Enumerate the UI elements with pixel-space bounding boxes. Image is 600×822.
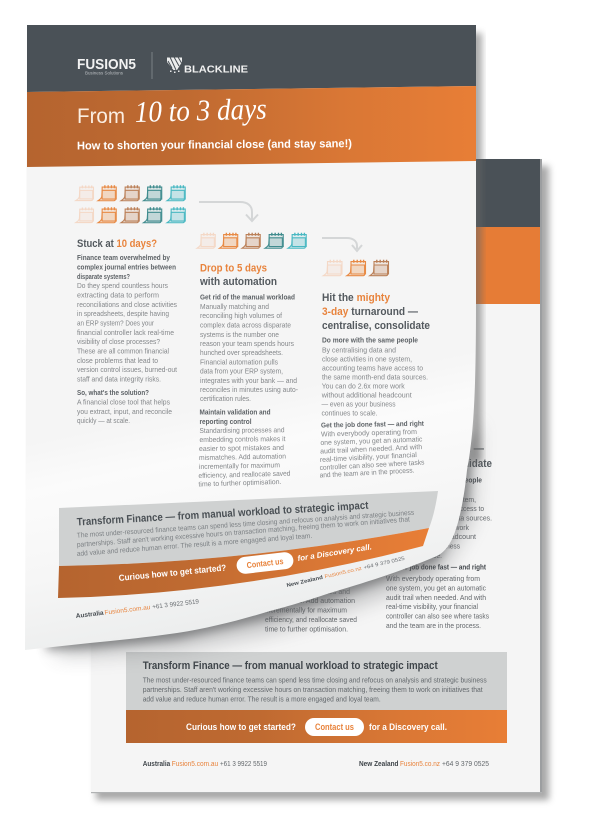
back column 3 text: By centralising data and	[386, 486, 460, 494]
body text: accounting teams have access to	[322, 364, 423, 372]
back column 2 text: mismatches. Add automation	[265, 597, 355, 605]
back column 3 text: continues to scale.	[386, 552, 442, 560]
back column 3 text: centralise, consolidate	[386, 458, 492, 470]
back page sheet	[91, 159, 542, 793]
heading: Stuck at 10 days?	[77, 238, 157, 250]
body text	[198, 294, 299, 488]
body text: audit trail when needed. And with	[320, 443, 422, 455]
body text: continues to scale.	[322, 410, 378, 418]
body text: Finance team overwhelmed by	[77, 255, 170, 262]
footer: New Zealand: +64 9 379 0525	[363, 556, 405, 571]
back footer contacts	[143, 761, 489, 768]
body text: close activities in one system,	[322, 356, 412, 364]
back column 3 text: and the team are in the process.	[386, 622, 481, 630]
back page	[91, 159, 549, 800]
back column 3 text: — even as your business	[386, 542, 460, 550]
heading: with automation	[199, 276, 277, 288]
body text: reconciles in minutes using auto-	[200, 386, 299, 394]
footer: New Zealand: New Zealand	[286, 575, 324, 589]
body text: version control issues, burned-out	[77, 366, 177, 374]
body text	[77, 255, 177, 425]
back panel: transform finance: Transform Finance — from manual workload to strategic impact	[143, 660, 438, 672]
body text: disparate systems?	[77, 274, 130, 281]
heading: Drop to 5 days	[200, 262, 267, 274]
contact button: Contact us	[246, 556, 284, 570]
body text: Manually matching and	[200, 303, 269, 311]
body text: Financial automation pulls	[200, 358, 278, 366]
body text: real-time visibility, your financial	[320, 451, 417, 464]
heading	[199, 262, 277, 288]
footer: Australia	[75, 598, 200, 620]
body text: reconciling high volumes of	[200, 312, 282, 320]
back column 3 text: controller can also see where tasks	[386, 612, 489, 620]
call to action: for a Discovery call.	[297, 542, 372, 563]
body text: efficiency, and reallocate saved	[198, 470, 291, 480]
front page curl shadow: wide	[55, 420, 478, 655]
body text: in spreadsheets, despite having	[77, 310, 169, 318]
title: 10 to 3 days	[134, 93, 267, 129]
icons: ten calendars	[76, 185, 185, 223]
logo: Fusion5: FUSION5	[77, 56, 136, 73]
back column 3 text	[385, 443, 492, 630]
body text: you extract, input, and reconcile	[77, 408, 172, 416]
body text: visibility of close processes?	[77, 338, 160, 346]
body text: incrementally for maximum	[199, 461, 280, 471]
icons: five calendars	[197, 233, 306, 248]
logo icon	[167, 57, 182, 73]
back panel: transform finance: add value and reduce human error. The result is a more engaged and loyal team.	[143, 696, 381, 704]
body text: reason your team spends hours	[200, 340, 294, 348]
body text: reconciliations and close activities	[77, 301, 177, 309]
title: From	[77, 105, 125, 128]
back page shadow	[96, 166, 549, 800]
logo: BlackLine	[167, 57, 248, 76]
back column 3 text: You can do 2.6x more work	[386, 524, 469, 532]
arrow: 10 to 5 days	[199, 202, 258, 221]
back panel: transform finance: partnerships. Staff aren't working excessive hours on transaction matching, freeing them to work on initiatives that	[143, 686, 483, 694]
body text: These are all common financial	[77, 348, 169, 356]
footer: New Zealand: Fusion5.co.nz	[324, 566, 363, 580]
body text: With everybody operating from	[321, 428, 417, 438]
call to action: Curious how to get started?	[118, 562, 227, 583]
icons: three calendars	[323, 260, 388, 276]
back orange banner	[91, 227, 540, 304]
call to action	[58, 528, 429, 598]
body text: reporting control	[200, 419, 252, 426]
column 3: mighty 3-day turnaround	[319, 292, 430, 479]
back column 3 text: Do more with the same people	[386, 478, 482, 484]
back column 2 text: easier to spot mistakes and	[265, 588, 350, 596]
arrow: 5 to 3 days	[322, 238, 362, 251]
body text: data from your ERP system,	[200, 368, 283, 376]
heading: 3-day turnaround —	[322, 306, 418, 318]
body text: Get rid of the manual workload	[200, 294, 295, 302]
body text: time to further optimisation.	[198, 478, 282, 488]
body text: Do more with the same people	[322, 338, 418, 345]
body text: integrates with your bank — and	[200, 377, 297, 385]
body text: complex journal entries between	[77, 264, 176, 272]
back footer contacts: +61 3 9922 5519	[220, 761, 267, 768]
body text: A financial close tool that helps	[77, 398, 170, 406]
front page sheet	[25, 25, 476, 650]
body text: So, what's the solution?	[77, 390, 149, 397]
body text: quickly — at scale.	[77, 417, 130, 425]
front page	[25, 25, 476, 650]
back call to action: Contact us	[315, 722, 354, 732]
back dark header	[91, 159, 540, 227]
back footer contacts: New Zealand	[359, 761, 398, 768]
body text: extracting data to perform	[77, 292, 159, 300]
back footer contacts: Fusion5.com.au	[172, 761, 218, 768]
back column 2 text: incrementally for maximum	[265, 606, 347, 614]
panel heading: Transform Finance — from manual workload to strategic impact	[76, 500, 369, 528]
back column 3 text: without additional headcount	[385, 533, 476, 541]
body text: complex data across disparate	[200, 322, 291, 330]
logo divider	[152, 52, 153, 79]
back footer contacts: Fusion5.co.nz	[400, 761, 440, 768]
panel body: add value and reduce human error. The result is a more engaged and loyal team.	[77, 532, 312, 558]
body text: Do they spend countless hours	[77, 282, 168, 290]
footer: New Zealand	[286, 556, 405, 589]
body text: financial controller lack real-time	[77, 329, 174, 337]
front page right edge shadow	[470, 33, 482, 463]
body text: the same month-end data sources.	[322, 374, 428, 382]
body text: controller can also see where tasks	[319, 458, 425, 472]
column 1: stuck at 10 days	[77, 238, 177, 425]
subtitle: How to shorten your financial close (and stay sane!)	[77, 138, 352, 152]
heading	[322, 292, 430, 332]
front dark header	[27, 25, 476, 92]
panel: transform finance	[59, 491, 438, 566]
body text: close problems that lead to	[77, 357, 158, 365]
back page right edge	[540, 159, 542, 793]
body text: — even as your business	[322, 400, 396, 408]
body text: an ERP system? Does your	[77, 320, 155, 328]
body text: systems is the number one	[200, 331, 279, 339]
back column 3 text: audit trail when needed. And with	[386, 594, 486, 602]
back column 2 text	[265, 588, 357, 634]
back panel: transform finance: The most under-resourced finance teams can spend less time closing and refocus on analysis and strategic business	[143, 677, 487, 685]
body text: one system, you get an automatic	[320, 435, 423, 447]
body text: By centralising data and	[322, 346, 396, 354]
body text: without additional headcount	[321, 392, 412, 400]
back column 3 text: Get the job done fast — and right	[386, 564, 487, 572]
body text: Maintain validation and	[200, 410, 270, 416]
back panel: transform finance	[126, 652, 507, 710]
back column 3 text: With everybody operating from	[386, 575, 480, 583]
front orange banner	[27, 86, 476, 167]
footer: Australia: Australia	[75, 610, 104, 620]
contact button	[236, 551, 294, 575]
body text: Standardising processes and	[199, 426, 285, 435]
back call to action: for a Discovery call.	[369, 722, 447, 732]
back footer contacts: +64 9 379 0525	[442, 761, 489, 768]
back call to action: Curious how to get started?	[186, 722, 296, 732]
title	[77, 93, 267, 129]
back column 3 text: real-time visibility, your financial	[386, 603, 478, 611]
back column 2 text: time to further optimisation.	[265, 626, 348, 634]
body text: and the team are in the process.	[319, 467, 415, 479]
body text: hunched over spreadsheets.	[200, 349, 283, 357]
back column 2 text: efficiency, and reallocate saved	[265, 616, 357, 624]
back column 3 text: 3-day turnaround —	[386, 443, 484, 455]
body text: staff and data integrity risks.	[77, 376, 161, 384]
column 2: drop to 5 days	[198, 262, 299, 488]
back footer contacts: Australia	[143, 761, 170, 768]
heading: centralise, consolidate	[322, 320, 430, 332]
panel body: The most under-resourced finance teams can spend less time closing and refocus on analysis and strategic business	[77, 509, 415, 540]
body text: Get the job done fast — and right	[321, 421, 425, 429]
back page bottom edge	[91, 792, 542, 793]
back column 3 text: close activities in one system,	[386, 496, 476, 504]
body text: mismatches. Add automation	[199, 452, 286, 462]
body text: certification rules.	[200, 395, 251, 403]
panel body	[77, 509, 415, 558]
front page curl shadow: near	[45, 430, 474, 650]
back column 3 text: the same month-end data sources.	[386, 514, 492, 522]
logo: Fusion5: Business Solutions	[85, 70, 123, 76]
body text	[319, 338, 428, 479]
back call to action	[126, 710, 507, 743]
heading: Hit the mighty	[322, 292, 390, 304]
panel body: partnerships. Staff aren't working excessive hours on transaction matching, freeing them to work on initiatives that	[77, 515, 410, 549]
logo: BlackLine: BLACKLINE	[184, 64, 248, 76]
back column 3 text: one system, you get an automatic	[386, 584, 486, 592]
footer: Australia: Fusion5.com.au	[104, 604, 151, 617]
body text: You can do 2.6x more work	[322, 382, 405, 390]
body text: easier to spot mistakes and	[199, 444, 284, 453]
footer: Australia: +61 3 9922 5519	[152, 598, 200, 611]
body text: embedding controls makes it	[199, 435, 286, 444]
back column 3 text: accounting teams have access to	[386, 505, 484, 513]
